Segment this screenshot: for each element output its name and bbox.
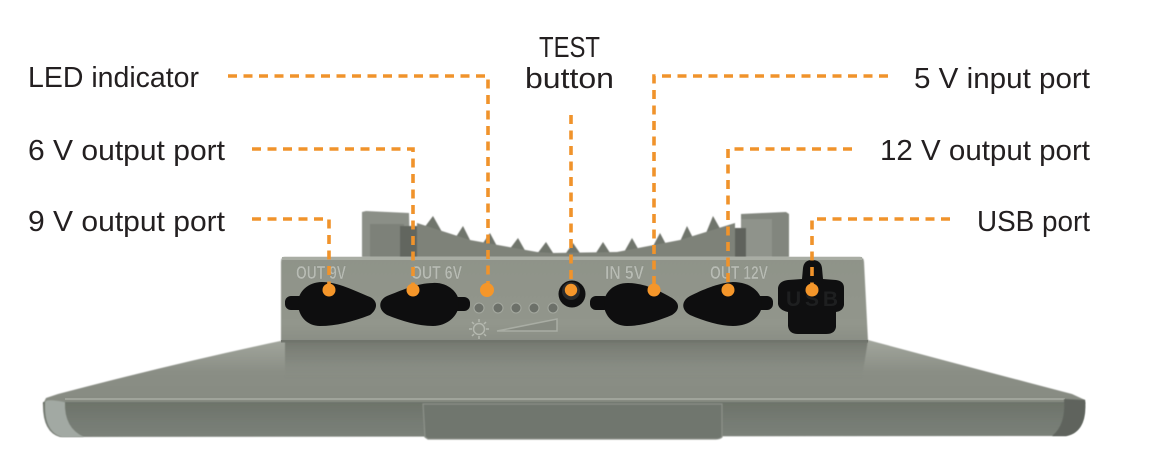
front latch [423, 404, 722, 439]
leader: USB port [812, 219, 950, 290]
cooling teeth [424, 216, 722, 256]
embossed port labels [296, 263, 768, 283]
LED row [474, 303, 558, 313]
embossed port labels: OUT 9V [296, 263, 346, 283]
port plug: 6 V [380, 283, 470, 326]
device photo [43, 211, 1085, 439]
recess below housing [285, 340, 868, 378]
leader: 5 V input port [654, 76, 888, 290]
base panel front edge [43, 402, 1085, 437]
marker dots [322, 283, 818, 297]
USB plug: USB [786, 288, 838, 311]
rear heat sink [362, 211, 789, 257]
test button [558, 280, 586, 308]
label: 5 V input port: 5 V input port [914, 63, 1090, 95]
label: USB port: USB port [977, 206, 1090, 238]
embossed port labels: OUT 12V [710, 263, 768, 283]
port plug: 5 V input [590, 283, 678, 326]
label: 12 V output port: 12 V output port [880, 135, 1090, 167]
leader: TEST button [569, 115, 573, 290]
port plug: 9 V [285, 282, 376, 326]
label: TEST button: TEST [539, 32, 600, 64]
embossed port labels: IN 5V [605, 263, 644, 283]
port housing [281, 257, 868, 341]
leader: 6 V output port [252, 149, 413, 290]
port plug: 12 V [683, 282, 773, 326]
leader: 12 V output port [728, 149, 852, 290]
label: 6 V output port: 6 V output port [28, 135, 225, 167]
label: LED indicator: LED indicator [28, 62, 199, 94]
base panel top surface [43, 340, 1085, 404]
label: 9 V output port: 9 V output port [28, 206, 225, 238]
embossed port labels: OUT 6V [411, 263, 462, 283]
USB plug [778, 260, 844, 334]
label: TEST button [525, 32, 614, 95]
label: TEST button: button [525, 63, 614, 95]
leader: 9 V output port [252, 219, 329, 290]
brightness icon [469, 319, 557, 339]
wedge surface [417, 223, 735, 257]
rim highlight [65, 398, 1065, 400]
leader: LED indicator [228, 76, 488, 285]
